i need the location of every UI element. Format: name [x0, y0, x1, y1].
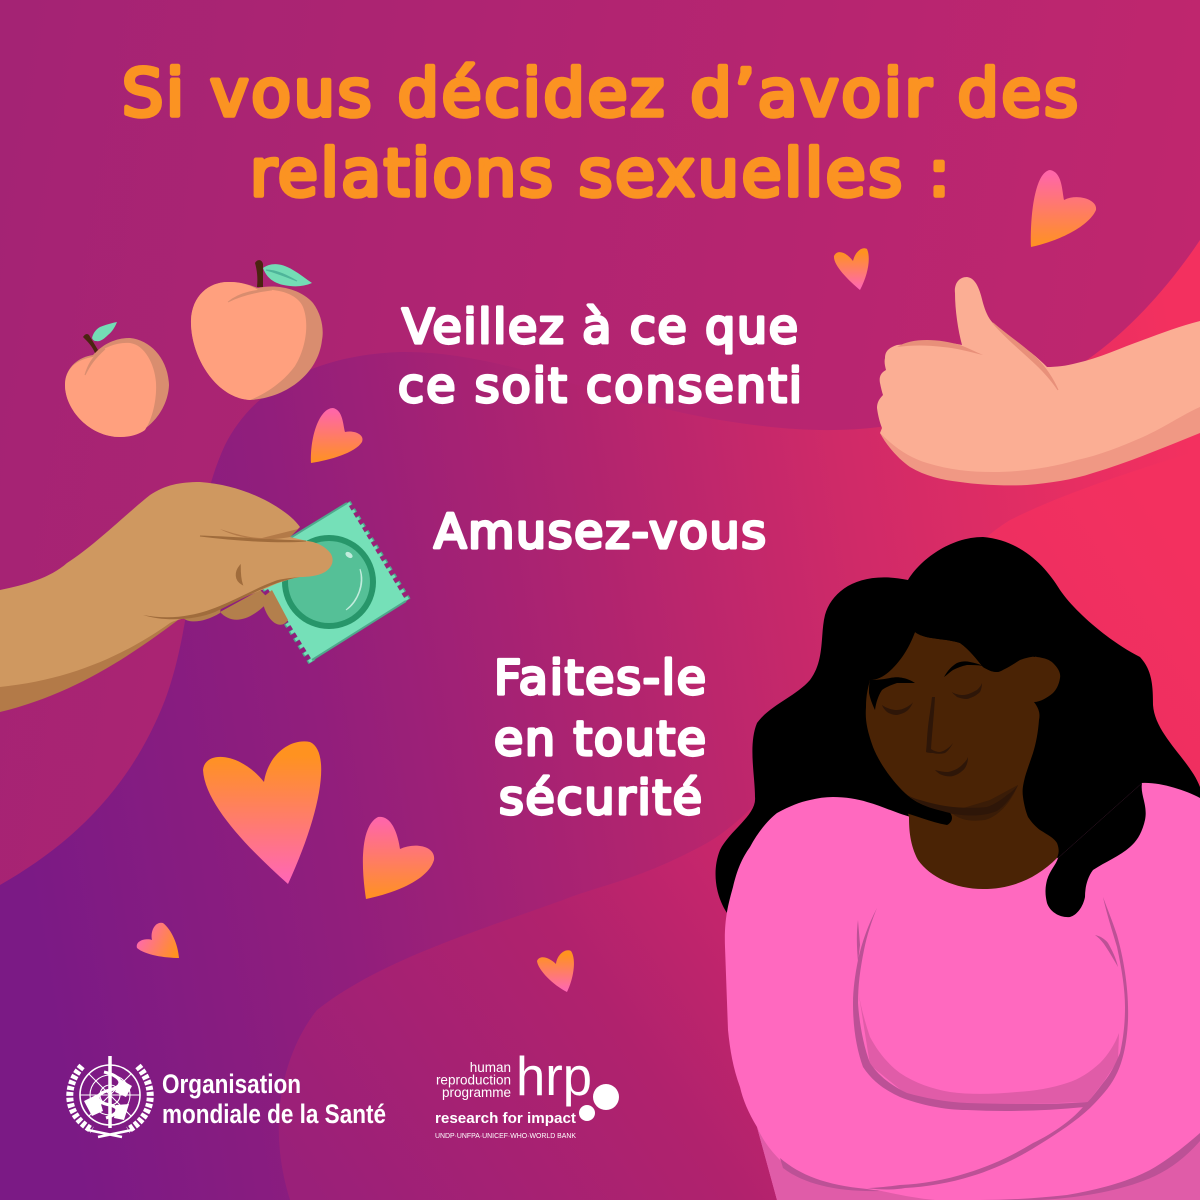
right arm crease — [867, 897, 1128, 1190]
main arm crease — [853, 908, 1088, 1111]
logo: HRP: human — [470, 1060, 511, 1075]
nose — [926, 697, 953, 754]
title: Si vous décidez d’avoir des — [122, 56, 1078, 132]
logo: WHO name: Organisation — [162, 1069, 301, 1099]
lower right crease — [980, 1133, 1200, 1200]
heart: near small peach — [311, 408, 363, 463]
lower left torso shade — [757, 1127, 935, 1200]
heart: below text left — [363, 817, 434, 899]
shirt — [725, 783, 1200, 1200]
lower left crease — [780, 1158, 880, 1191]
lower right torso shade — [1020, 1137, 1200, 1200]
text: have fun message: Amusez-vous — [434, 505, 766, 560]
neck shadow — [950, 785, 1018, 821]
text: safety message: en toute — [494, 712, 706, 767]
icon: hand holding condom — [0, 482, 333, 712]
hair lock over shoulder — [1046, 783, 1146, 917]
text: consent message — [398, 300, 802, 414]
small chest crease — [1095, 935, 1118, 967]
hair strand over shoulder — [880, 787, 952, 825]
icon: thumbs-up hand — [877, 277, 1200, 485]
title — [122, 56, 1078, 212]
text: consent message: ce soit consenti — [398, 359, 802, 414]
logo: HRP — [435, 1045, 619, 1140]
logo: HRP: research for impact — [435, 1110, 576, 1127]
heart: top right small — [834, 248, 869, 290]
logo: HRP: programme — [442, 1085, 511, 1100]
heart: bottom left small — [137, 923, 179, 958]
text: safety message: Faites-le — [494, 651, 706, 706]
icon: condom wrapper — [250, 503, 408, 662]
mouth — [935, 757, 968, 776]
heart: large centre-left — [203, 741, 321, 884]
logo: WHO name: mondiale de la Santé — [162, 1099, 386, 1129]
closed eyes — [882, 683, 982, 715]
hair fringe — [860, 574, 1039, 680]
illustration: woman with arms crossed — [716, 537, 1200, 1200]
logo: HRP: UNDP·UNFPA·UNICEF·WHO·WORLD BANK — [435, 1133, 576, 1140]
chest fold shade — [857, 983, 1119, 1106]
heart: top right large — [1031, 170, 1096, 247]
left eyebrow and temple wisp — [869, 677, 915, 710]
title: relations sexuelles : — [250, 136, 950, 212]
icon: large peach — [191, 260, 323, 400]
right eyebrow — [944, 661, 983, 677]
logo: WHO emblem — [70, 1056, 150, 1137]
face and neck — [866, 632, 1060, 889]
logo: HRP: hrp — [516, 1045, 592, 1107]
chin shadow — [899, 785, 1018, 816]
text: safety message: sécurité — [499, 771, 702, 826]
text: safety message — [494, 651, 706, 826]
text: consent message: Veillez à ce que — [402, 300, 798, 355]
logo: WHO name — [162, 1069, 386, 1129]
icon: small peach — [65, 322, 169, 437]
heart: bottom centre small — [537, 950, 574, 992]
hair back — [716, 537, 1200, 913]
logo: HRP: reproduction — [436, 1072, 511, 1088]
